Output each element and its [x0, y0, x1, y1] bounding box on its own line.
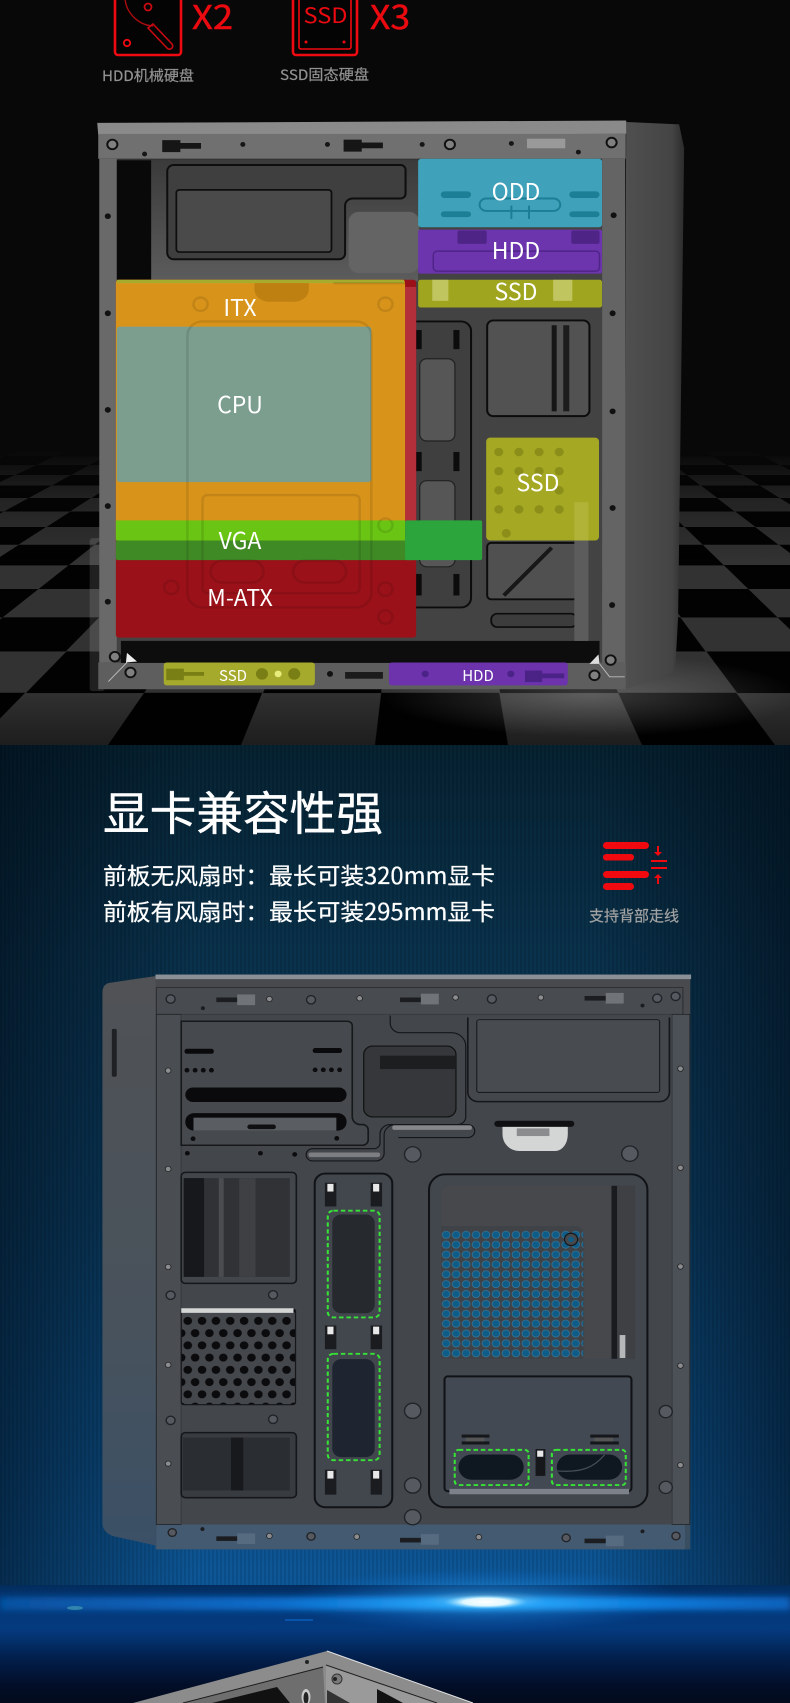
orange cut-out notch	[254, 283, 309, 302]
case frame	[156, 976, 690, 1549]
zone labels: ITX	[223, 289, 257, 323]
zone labels: HDD	[462, 665, 494, 686]
panel: glow band background	[0, 1585, 790, 1703]
text: length without front fan: 前板无风扇时：最长可装320mm显卡	[103, 857, 495, 891]
front panel	[102, 976, 156, 1546]
icon: cable management	[603, 842, 667, 890]
icon: HDD drive	[115, 0, 181, 55]
chart: case interior with component zones	[90, 121, 684, 691]
zone: CPU	[117, 327, 371, 482]
zone: M-ATX	[116, 280, 416, 638]
left windows	[181, 1172, 296, 1283]
label: SSD drive type: SSD固态硬盘	[280, 64, 369, 85]
standoffs and screws	[166, 992, 680, 1542]
zone labels: ODD	[492, 173, 540, 207]
center rail	[315, 1174, 392, 1507]
blue light flare	[0, 1567, 790, 1633]
zone: HDD bottom	[389, 662, 568, 685]
zone labels: M-ATX	[207, 579, 273, 613]
zone: SSD rear	[486, 438, 599, 540]
cable hole bottom right	[552, 1450, 626, 1485]
floor lighting and fade	[0, 0, 790, 745]
case corner peeking from bottom	[133, 1651, 473, 1703]
text: length with front fan: 前板有风扇时：最长可装295mm显卡	[103, 893, 495, 927]
zone overlays	[116, 159, 602, 685]
top rail fixtures	[142, 140, 581, 156]
checker floor	[0, 465, 790, 745]
case body	[90, 121, 684, 691]
mesh vent	[441, 1230, 583, 1359]
zone: VGA	[116, 520, 482, 560]
zone labels: SSD	[517, 464, 559, 498]
zone: ITX	[116, 280, 405, 540]
cable hole upper	[328, 1211, 380, 1317]
cable hole bottom left	[455, 1450, 529, 1485]
panel: blue background section	[0, 745, 790, 1585]
icon: SSD drive: SSD	[304, 0, 348, 30]
PSU bay	[429, 1174, 647, 1507]
overlay see-through details	[164, 283, 406, 624]
zone: ODD	[418, 159, 602, 227]
drive bay plate	[181, 1021, 368, 1145]
rail keyholes	[200, 993, 645, 1546]
zone labels: HDD	[492, 232, 540, 266]
icon: SSD drive	[293, 0, 357, 55]
zone labels	[207, 173, 559, 686]
zone labels: SSD	[219, 665, 247, 686]
zone labels: CPU	[217, 386, 263, 420]
openings	[364, 1046, 456, 1117]
zone: SSD upper	[418, 280, 602, 308]
panel: dark top background with checker floor	[0, 0, 790, 745]
label: HDD drive type: HDD机械硬盘	[102, 65, 194, 86]
zone labels: VGA	[219, 522, 261, 556]
chart: case rear view with cable routing holes	[102, 975, 691, 1549]
label: rear cable routing: 支持背部走线	[589, 905, 679, 926]
zone: SSD bottom	[164, 662, 315, 685]
cable hole lower	[328, 1354, 380, 1460]
zone: HDD upper	[418, 230, 602, 274]
title: 显卡兼容性强	[103, 778, 383, 844]
zone labels: SSD	[495, 273, 537, 307]
